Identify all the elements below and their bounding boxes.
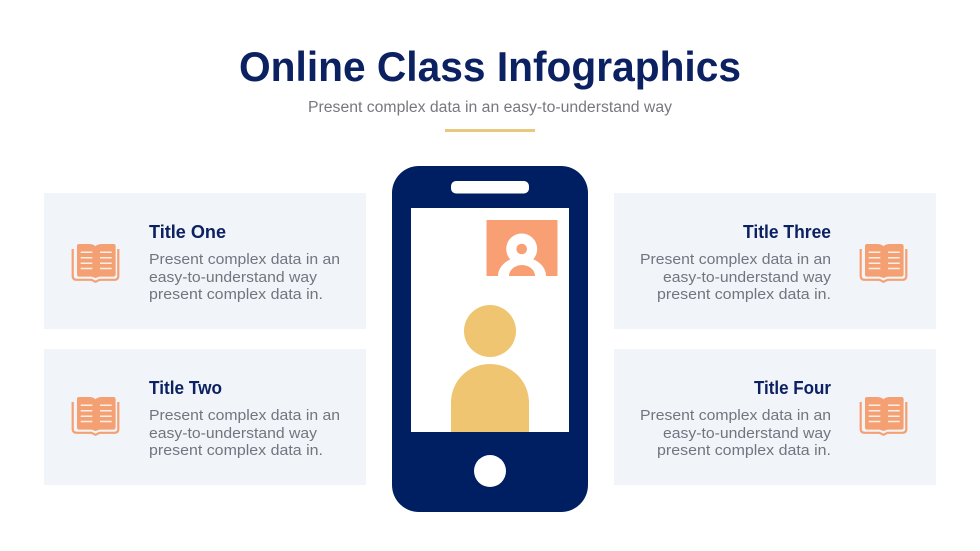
text block: title three: Present complex data in an — [640, 251, 831, 268]
text block: title one: present complex data in. — [149, 286, 323, 303]
text block: title one: Present complex data in an — [149, 251, 340, 268]
icon: open book two — [73, 397, 118, 435]
text block: title two: Present complex data in an — [149, 407, 340, 424]
icon: open book four — [861, 397, 906, 435]
text block: title two: easy-to-understand way — [149, 425, 318, 442]
text block: title three: present complex data in. — [657, 286, 831, 303]
text block: title four: Present complex data in an — [640, 407, 831, 424]
panel: title one — [44, 193, 366, 329]
phone illustration — [392, 166, 588, 512]
text block: title four: easy-to-understand way — [663, 425, 832, 442]
heading: title four: Title Four — [754, 378, 831, 398]
text block: title one: easy-to-understand way — [149, 269, 318, 286]
text block: title three — [640, 251, 832, 303]
heading: title two: Title Two — [149, 378, 222, 398]
panel: title four — [614, 349, 936, 485]
icon: open book one — [73, 244, 118, 282]
text block: title four: present complex data in. — [657, 442, 831, 459]
title underline accent — [445, 129, 535, 132]
panel: title three — [614, 193, 936, 329]
icon: main presenter figure — [451, 305, 529, 432]
text block: title two: present complex data in. — [149, 442, 323, 459]
panel: title two — [44, 349, 366, 485]
text block: title one — [149, 251, 340, 303]
heading: title one: Title One — [149, 222, 226, 242]
text block: title four — [640, 407, 832, 459]
icon: remote participant video tile — [486, 220, 558, 276]
text block: title three: easy-to-understand way — [663, 269, 832, 286]
subtitle: Present complex data in an easy-to-understand way — [308, 99, 672, 116]
text block: title two — [149, 407, 340, 459]
icon: open book three — [861, 244, 906, 282]
heading: title three: Title Three — [743, 222, 831, 242]
title: Online Class Infographics — [239, 43, 741, 90]
